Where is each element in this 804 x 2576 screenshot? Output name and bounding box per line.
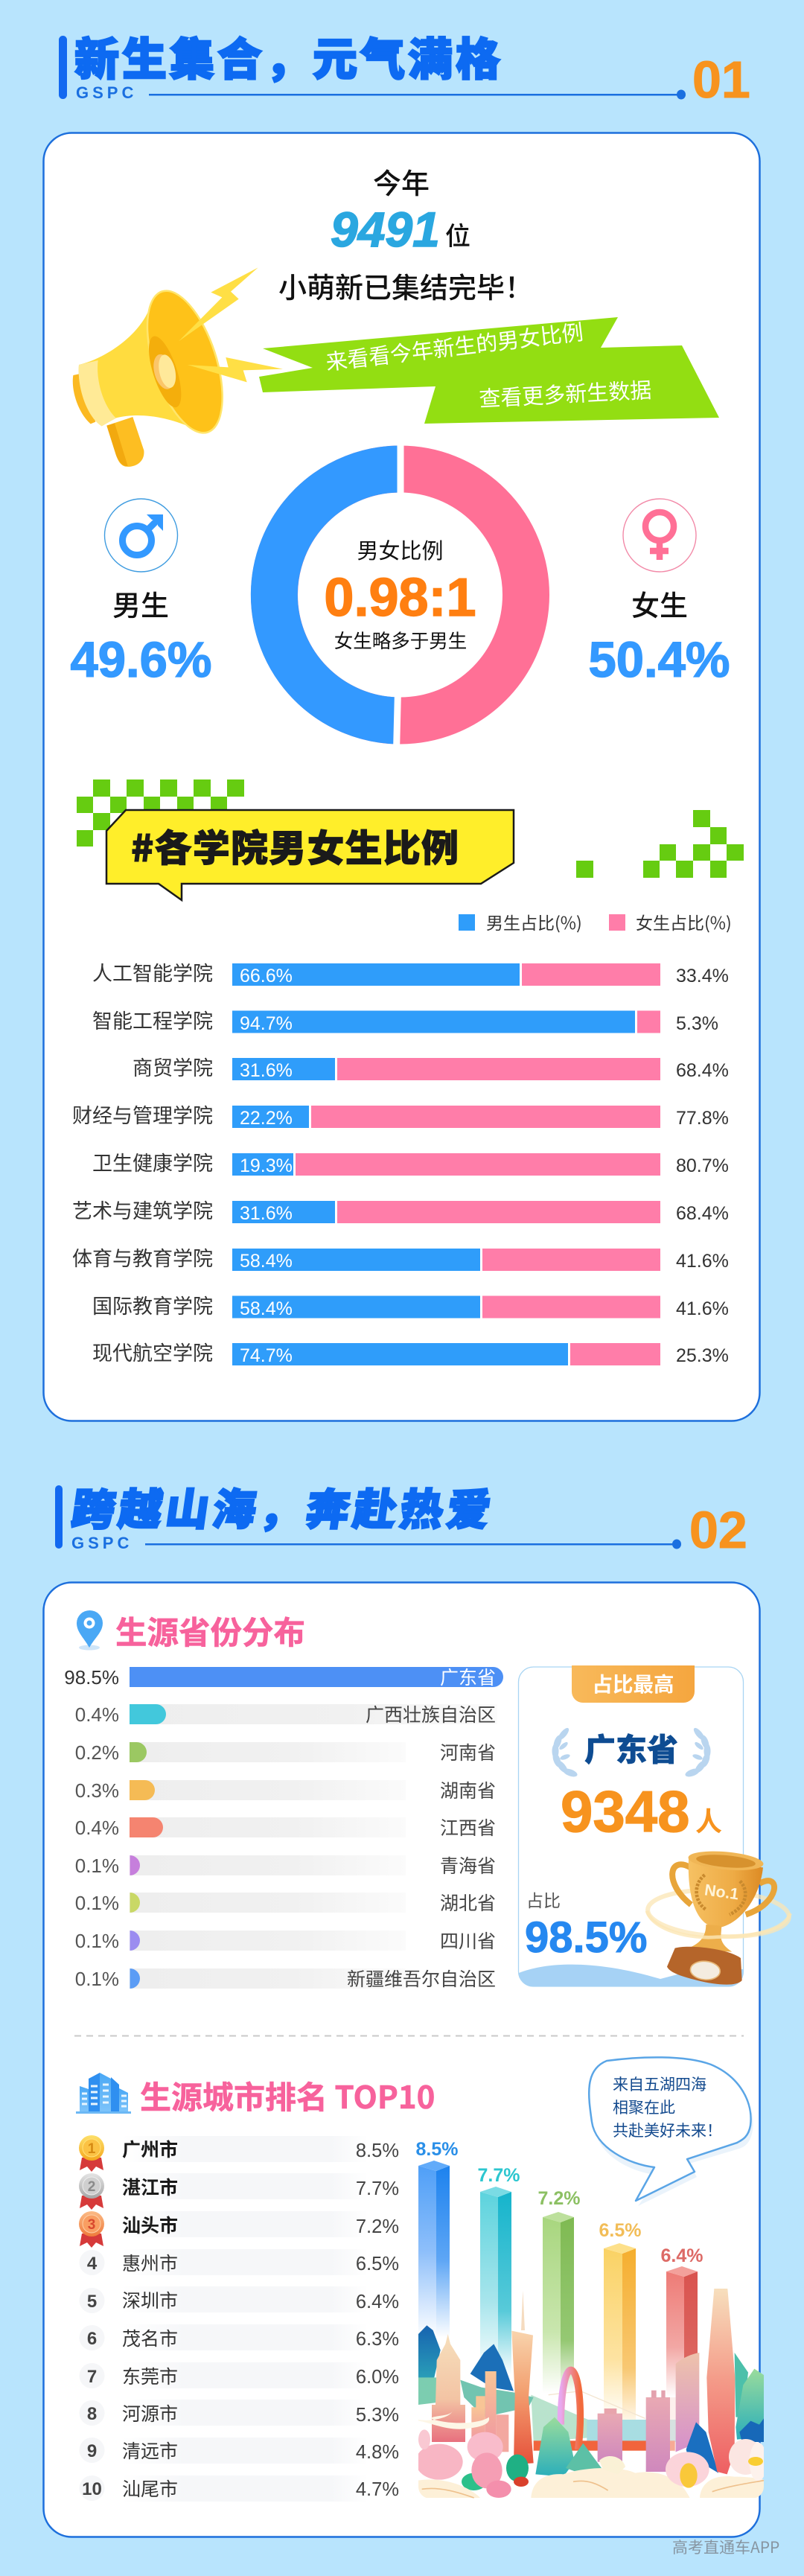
top province count: 9348 [561,1779,690,1844]
bar chart: college gender ratio: 41.6% [676,1251,729,1272]
icon: bronze medal: 3 [88,2217,95,2233]
bar chart: provinces: 0.4% [75,1817,119,1839]
bar chart: college gender ratio: 31.6% [240,1203,293,1224]
ranking list: top 10 cities: 汕尾市 [122,2475,178,2502]
headline text: 位 [445,216,470,252]
bar chart: college gender ratio: 31.6% [240,1060,293,1081]
bar chart: provinces: 0.3% [75,1779,119,1802]
section title: 跨越山海，奔赴热爱 [68,1474,499,1537]
ranking list: top 10 cities: 广州市 [122,2135,178,2162]
heading label: college ratio [106,810,514,900]
bar chart: college gender ratio: 25.3% [676,1345,729,1366]
green banner: 查看更多新生数据 [478,373,652,413]
female stat: 女生 [631,583,688,624]
bar chart: college gender ratio: 33.4% [676,966,729,986]
bar chart: college gender ratio: 74.7% [240,1345,293,1366]
icon: trophy [647,1849,791,1985]
section header 01: GSPC [76,83,137,102]
divider [74,2035,744,2037]
ranking list: top 10 cities: 河源市 [122,2400,178,2426]
bar chart: provinces: 0.1% [75,1892,119,1914]
3D bar chart: top 5 cities: 7.2% [538,2188,580,2209]
icon: gold medal: 1 [88,2141,96,2157]
laurel left [551,1727,578,1779]
bar chart: provinces: 0.1% [75,1930,119,1952]
ranking list: top 10 cities: 8.5% [356,2140,399,2161]
3D bar chart: top 5 cities [416,2139,703,2420]
bar chart: provinces: 98.5% [64,1666,119,1689]
laurel right [684,1727,712,1779]
3D bar chart: top 5 cities: 7.7% [478,2165,520,2186]
section number: 02 [689,1501,747,1559]
bar chart: provinces: 0.2% [75,1741,119,1764]
ranking list: top 10 cities: 4 [87,2254,98,2274]
chart legend: 女生占比(%) [636,909,732,934]
ranking list: top 10 cities: 9 [87,2441,97,2461]
bar chart: provinces: 新疆维吾尔自治区 [347,1965,496,1992]
donut chart [274,439,526,748]
ratio value: 0.98:1 [324,568,476,628]
ranking list: top 10 cities: 深圳市 [122,2286,178,2313]
panel: highest share [518,1665,743,1986]
bar chart: college gender ratio: 人工智能学院 [92,957,213,986]
speech bubble: 来自五湖四海 [613,2073,706,2095]
headline text: 小萌新已集结完毕！ [278,265,533,306]
headline text: 9491 [331,202,440,257]
panel: highest share: 98.5% [525,1913,647,1962]
bar chart: college gender ratio: 商贸学院 [133,1052,213,1081]
bar chart: college gender ratio: 艺术与建筑学院 [72,1195,213,1224]
ranking list: top 10 cities: 6.3% [356,2329,399,2350]
bar chart: college gender ratio: 66.6% [240,966,293,986]
bar chart: provinces: 0.1% [75,1855,119,1877]
ranking list: top 10 cities: 东莞市 [122,2362,178,2389]
bar chart: provinces: 湖南省 [440,1776,496,1803]
ranking list: top 10 cities: 10 [82,2479,102,2499]
bar chart: provinces: 湖北省 [440,1889,496,1916]
speech bubble: 共赴美好未来！ [613,2119,722,2141]
watermark: 高考直通车APP [672,2536,779,2558]
decorative green checker left [77,780,244,847]
panel: freshmen overview [43,133,759,1421]
bar chart: college gender ratio: 体育与教育学院 [72,1243,213,1272]
bar chart: college gender ratio: 80.7% [676,1155,729,1176]
panel: source of students [43,1583,791,2537]
section header 01 [59,24,750,109]
tab label [572,1665,695,1703]
icon: male symbol [104,499,177,572]
bar chart: college gender ratio: 现代航空学院 [92,1337,213,1366]
ranking list: top 10 cities: 5 [87,2292,97,2312]
speech bubble [589,2057,753,2206]
bar chart: college gender ratio: 94.7% [240,1013,293,1034]
heading label: college ratio: #各学院男女生比例 [131,819,459,873]
chart legend: 男生占比(%) [486,909,582,934]
panel: highest share: 广东省 [584,1725,678,1770]
ranking list: top 10 cities: 茂名市 [122,2324,178,2351]
bar chart: college gender ratio: 68.4% [676,1203,729,1224]
ranking list: top 10 cities: 7.2% [356,2216,399,2237]
ranking list: top 10 cities: 汕头市 [122,2211,178,2238]
bar chart: provinces: 0.4% [75,1703,119,1726]
speech bubble: 相聚在此 [613,2096,675,2118]
icon: silver medal [79,2173,104,2210]
ranking list: top 10 cities: 4.7% [356,2479,399,2500]
bar chart: provinces: 广西壮族自治区 [366,1700,496,1727]
chart legend [459,909,732,934]
icon: megaphone [73,267,283,467]
donut chart: 男女比例 [357,534,444,565]
female stat [589,583,730,688]
ranking list: top 10 cities: 6.4% [356,2292,399,2312]
bar chart: college gender ratio: 58.4% [240,1298,293,1319]
ranking list: top 10 cities: 8 [87,2404,97,2424]
3D bar chart: top 5 cities: 6.4% [661,2245,703,2266]
bar chart: college gender ratio: 财经与管理学院 [72,1100,213,1129]
icon: silver medal: 2 [88,2179,95,2195]
ranking list: top 10 cities: 清远市 [122,2437,178,2464]
heading: city ranking: 生源城市排名 TOP10 [140,2073,435,2118]
icon: gold medal [79,2135,104,2172]
ranking list: top 10 cities: 6.0% [356,2367,399,2388]
ranking list: top 10 cities: 6 [87,2329,97,2349]
section number: 01 [692,51,750,109]
icon: buildings [76,2073,131,2114]
bar chart: college gender ratio: 58.4% [240,1251,293,1272]
ranking list: top 10 cities: 6.5% [356,2254,399,2274]
icon: trophy: No.1 [704,1881,740,1904]
panel: highest share: 占比最高 [593,1668,674,1697]
ranking list: top 10 cities: 惠州市 [122,2249,178,2276]
3D bar chart: top 5 cities: 6.5% [599,2220,641,2241]
ranking list: top 10 cities: 湛江市 [122,2173,178,2200]
decorative green checker right [576,810,744,878]
icon: location pin [77,1610,103,1650]
male stat: 男生 [112,583,169,624]
bar chart: college gender ratio: 智能工程学院 [92,1005,213,1034]
bar chart: provinces: 0.1% [75,1968,119,1990]
section header 02 [55,1474,747,1559]
bar chart: college gender ratio: 22.2% [240,1108,293,1129]
donut chart: 女生略多于男生 [334,626,467,654]
female stat: 50.4% [589,632,730,688]
bar chart: provinces: 四川省 [440,1927,496,1954]
headline text [278,161,533,306]
headline text: 今年 [373,161,430,202]
section header 02: GSPC [71,1534,133,1552]
bar chart: college gender ratio [72,957,729,1366]
ranking list: top 10 cities: 4.8% [356,2442,399,2463]
green banner [259,315,719,424]
green banner: 来看看今年新生的男女比例 [324,315,585,377]
ranking list: top 10 cities: 7.7% [356,2178,399,2199]
bar chart: provinces: 江西省 [440,1814,496,1840]
illustration: cityscape [415,2289,767,2498]
ranking list: top 10 cities: 7 [87,2367,97,2387]
ranking list: top 10 cities [79,2135,399,2502]
bar chart: provinces: 河南省 [440,1738,496,1765]
bar chart: college gender ratio: 77.8% [676,1108,729,1129]
bar chart: college gender ratio: 国际教育学院 [92,1290,213,1319]
bar chart: provinces: 广东省 [440,1663,496,1690]
3D bar chart: top 5 cities: 8.5% [416,2139,458,2160]
bar chart: college gender ratio: 41.6% [676,1298,729,1319]
icon: bronze medal [79,2211,104,2248]
section title: 新生集合，元气满格 [74,24,503,89]
panel: highest share: 人 [695,1800,722,1839]
bar chart: provinces [64,1663,503,1992]
bar chart: college gender ratio: 19.3% [240,1155,293,1176]
bar chart: college gender ratio: 68.4% [676,1060,729,1081]
bar chart: college gender ratio: 5.3% [676,1013,718,1034]
bar chart: provinces: 青海省 [440,1852,496,1878]
ranking list: top 10 cities: 5.3% [356,2405,399,2426]
heading: province distribution: 生源省份分布 [115,1608,305,1654]
bar chart: college gender ratio: 卫生健康学院 [92,1147,213,1176]
male stat [71,583,211,688]
panel: highest share: 占比 [526,1887,561,1912]
wave decoration [519,1965,743,1986]
icon: female symbol [623,499,696,572]
male stat: 49.6% [71,632,211,688]
